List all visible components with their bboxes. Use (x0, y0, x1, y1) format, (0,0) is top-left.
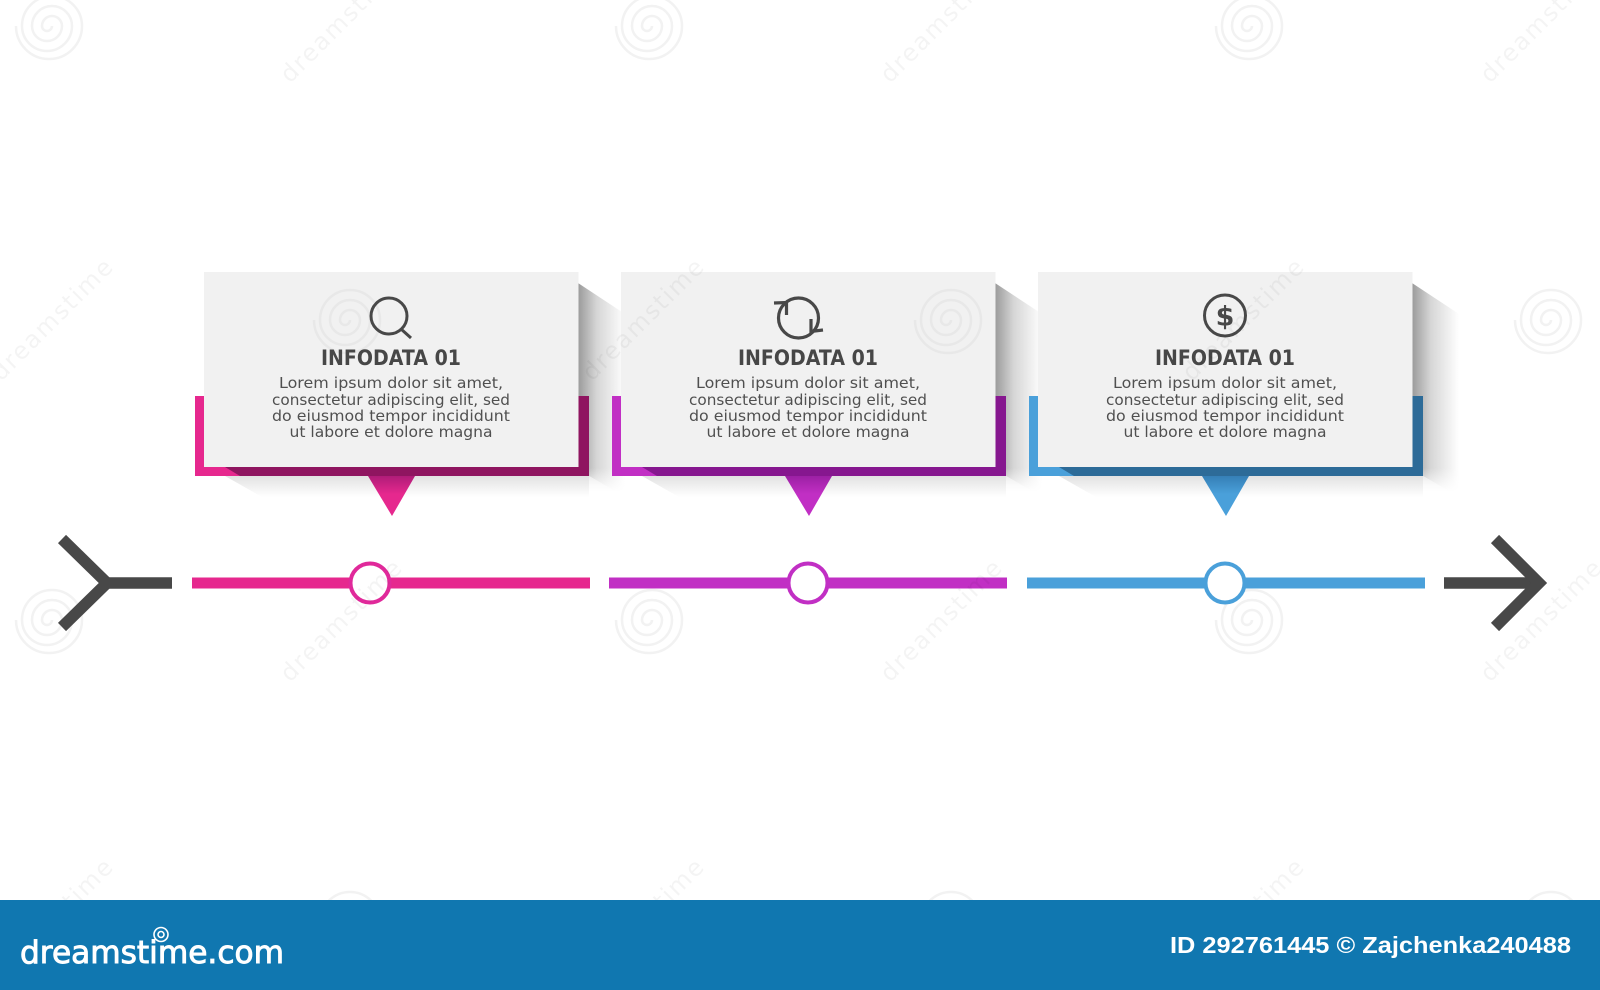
text block card 1: do eiusmod tempor incididunt (272, 407, 510, 425)
timeline segment 1 (192, 564, 590, 602)
card 3 box (1038, 272, 1412, 467)
card 3 coloured backing (1029, 396, 1423, 476)
watermark text: dreamstime (874, 554, 1007, 687)
watermark spiral on card 1 (314, 290, 380, 353)
card 1 pointer (368, 476, 415, 516)
panel: card 1 (195, 272, 626, 516)
text block card 3: consectetur adipiscing elit, sed (1106, 391, 1344, 409)
text block card 1: Lorem ipsum dolor sit amet, (279, 374, 503, 392)
watermark text: dreamstime (1176, 853, 1309, 986)
card 3 pointer (1202, 476, 1249, 516)
arrow: timeline start (62, 539, 172, 627)
heading card 2: INFODATA 01 (738, 346, 878, 370)
watermark text: dreamstime (1176, 253, 1309, 386)
timeline segment 2 (609, 564, 1007, 602)
text block card 3: ut labore et dolore magna (1124, 423, 1326, 441)
watermark text: dreamstime (576, 253, 709, 386)
card 2 shadows (642, 283, 1043, 498)
watermark spiral on card 2 (915, 290, 981, 353)
text block card 3: Lorem ipsum dolor sit amet, (1113, 374, 1337, 392)
card 1 shadows (225, 283, 626, 498)
card 2 coloured backing (612, 396, 1006, 476)
text block card 2 (689, 374, 927, 441)
arrow: timeline end (1444, 539, 1539, 627)
heading card 3: INFODATA 01 (1155, 346, 1295, 370)
text block card 2: Lorem ipsum dolor sit amet, (696, 374, 920, 392)
timeline segment 3 (1027, 564, 1425, 602)
card 2 pointer (785, 476, 832, 516)
icon: dollar coin (1204, 295, 1246, 336)
image id credit: ID 292761445 © Zajchenka240488 (1170, 932, 1571, 958)
text block card 1: consectetur adipiscing elit, sed (272, 391, 510, 409)
watermark text: dreamstime (274, 554, 407, 687)
panel: card 2 (612, 272, 1043, 516)
text block card 3 (1106, 374, 1344, 441)
logo text: dreamstime.com (20, 935, 284, 971)
text block card 2: consectetur adipiscing elit, sed (689, 391, 927, 409)
panel: card 3 (1029, 272, 1460, 516)
text block card 1: ut labore et dolore magna (290, 423, 492, 441)
card 1 box (204, 272, 578, 467)
footer bar (0, 900, 1600, 990)
heading card 1: INFODATA 01 (321, 346, 461, 370)
card 1 coloured backing (195, 396, 589, 476)
text block card 3: do eiusmod tempor incididunt (1106, 407, 1344, 425)
text block card 2: ut labore et dolore magna (706, 423, 910, 441)
card 2 box (621, 272, 996, 467)
watermark text: dreamstime (576, 853, 709, 986)
text block card 2: do eiusmod tempor incididunt (689, 407, 927, 425)
card 3 shadows (1059, 283, 1460, 498)
text block card 1 (272, 374, 510, 441)
logo spiral (154, 928, 168, 942)
icon: dollar coin: $ (1216, 302, 1234, 332)
icon: magnifier (371, 298, 411, 338)
icon: refresh (774, 298, 823, 338)
